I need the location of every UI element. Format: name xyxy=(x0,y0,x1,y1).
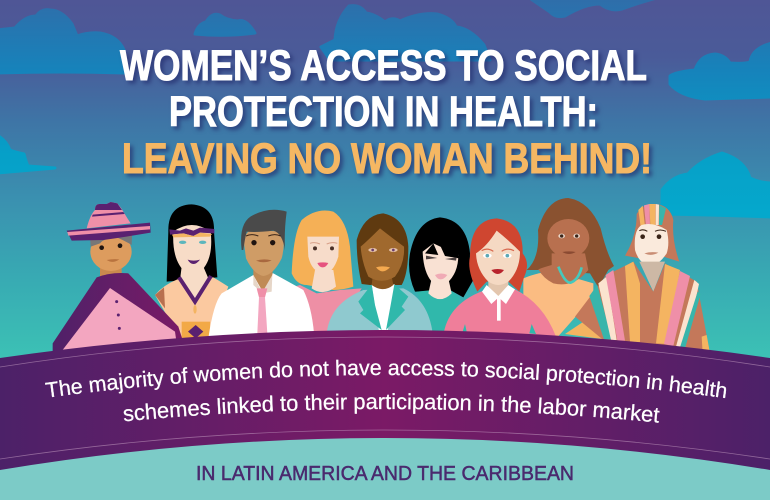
woman 7: red hair, pink top with white collar xyxy=(444,218,556,337)
woman 2: headband and black hair xyxy=(155,204,228,342)
banner stitching xyxy=(0,337,770,459)
banner text line 1: The majority of women do not have access to social protection in health xyxy=(45,360,726,398)
woman 3: white shirt and pink tie xyxy=(208,210,314,338)
woman 8: long brown hair, peach top xyxy=(523,198,614,340)
curved purple banner xyxy=(0,330,770,470)
title line 1: WOMEN’S ACCESS TO SOCIAL xyxy=(120,43,647,90)
title xyxy=(120,43,652,183)
woman 5: brown skin, teal blazer xyxy=(327,213,433,333)
title line 2: PROTECTION IN HEALTH: xyxy=(169,89,598,136)
title line 3 highlighted: LEAVING NO WOMAN BEHIND! xyxy=(122,136,652,183)
woman 6: black hair, teal top xyxy=(409,217,473,333)
sky background xyxy=(0,0,770,360)
banner text line 2: schemes linked to their participation in the labor market xyxy=(124,393,660,423)
region subtitle: IN LATIN AMERICA AND THE CARIBBEAN xyxy=(196,463,574,485)
clouds xyxy=(0,0,770,217)
group of nine women xyxy=(53,198,710,353)
banner shape xyxy=(0,330,770,470)
woman 9: striped hood and poncho xyxy=(565,204,710,353)
woman 1: sombrero and purple poncho xyxy=(53,202,183,353)
lower teal band xyxy=(0,420,770,500)
woman 4: blonde hair, pink top xyxy=(283,211,362,333)
